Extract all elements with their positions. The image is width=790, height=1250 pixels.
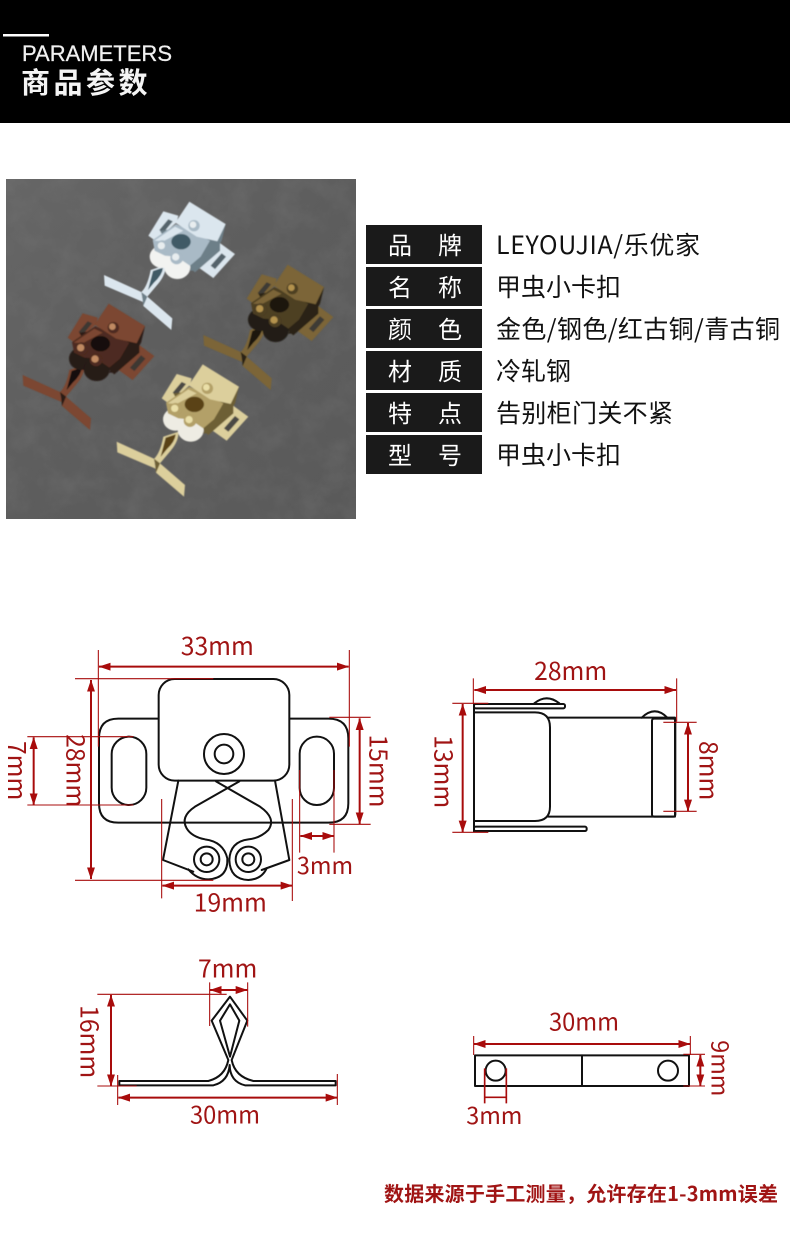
row: brand: 牌 (438, 226, 462, 261)
row: brand: LEYOUJIA/乐优家 (496, 226, 700, 262)
row: brand (366, 225, 700, 264)
row: feature: 点 (438, 394, 462, 429)
row: feature: 告别柜门关不紧 (496, 394, 673, 430)
dimension: 3mm hole: 3mm (466, 1097, 522, 1131)
dimension: 28mm height: 28mm (59, 734, 95, 807)
product photo: four cabinet latches on concrete (6, 179, 356, 519)
dimension: 28mm height (59, 679, 213, 880)
dimension: 7mm slot (0, 737, 133, 805)
dimension: 7mm tip: 7mm (198, 949, 257, 985)
parameter table (366, 225, 780, 474)
antique bronze latch (203, 265, 333, 390)
row: feature (366, 393, 673, 432)
row: material: 冷轧钢 (496, 352, 571, 388)
dimension: 3mm slot width (297, 770, 353, 881)
header band (0, 0, 790, 123)
dimension: 33mm width: 33mm (181, 627, 254, 663)
dimension: 30mm length: 30mm (190, 1097, 260, 1131)
side outline (474, 698, 675, 832)
row: model (366, 435, 621, 474)
row: brand: 品 (388, 226, 412, 261)
gold latch (117, 364, 248, 497)
row: model: 甲虫小卡扣 (496, 436, 621, 472)
dimension: 28mm length (473, 652, 677, 722)
dimension: 30mm length: 30mm (549, 1004, 619, 1038)
dimension: 7mm slot: 7mm (0, 741, 36, 800)
red copper latch (23, 304, 154, 430)
silver latch (104, 202, 235, 330)
dimension: 13mm depth (427, 703, 488, 832)
dimension: 9mm width: 9mm (705, 1040, 739, 1096)
row: name: 甲虫小卡扣 (496, 268, 621, 304)
latch outline (99, 679, 348, 880)
row: name: 称 (438, 268, 462, 303)
dimension: 15mm plate (329, 717, 397, 824)
dimension: 19mm arms (162, 799, 292, 920)
dimension: 30mm length (474, 1004, 690, 1055)
row: material: 质 (438, 352, 462, 387)
dimension: 7mm tip (198, 949, 257, 1027)
dimension: 9mm width (683, 1040, 739, 1096)
dimension: 28mm length: 28mm (534, 652, 607, 688)
row: colour: 色 (438, 310, 462, 345)
diagram: latch side view (427, 652, 727, 832)
header accent line (3, 34, 49, 36)
dimension: 19mm arms: 19mm (194, 884, 267, 920)
footnote: measurement tolerance: 数据来源于手工测量，允许存在1-3mm误差 (384, 1178, 778, 1207)
dimension: 30mm length (118, 1074, 337, 1131)
row: name (366, 267, 621, 306)
row: material: 材 (388, 352, 412, 387)
dimension: 3mm hole (466, 1068, 522, 1131)
dimension: 16mm height: 16mm (73, 1005, 109, 1078)
row: colour (366, 309, 780, 348)
dimension: 16mm height (73, 994, 227, 1086)
dimension: 13mm depth: 13mm (427, 735, 463, 808)
dimension: 8mm roller (663, 722, 727, 811)
diagram: strike plate flat view (466, 1004, 739, 1131)
diagram: latch front view (0, 627, 397, 920)
row: name: 名 (388, 268, 412, 303)
heading: 商品参数: 商品参数 (21, 67, 151, 100)
row: colour: 金色/钢色/红古铜/青古铜 (496, 310, 780, 346)
row: model: 号 (438, 436, 462, 471)
dimension: 15mm plate: 15mm (361, 734, 397, 808)
strike outline (119, 997, 336, 1085)
heading: PARAMETERS: PARAMETERS (22, 41, 172, 66)
dimension: 3mm slot width: 3mm (297, 847, 353, 881)
diagram: strike plate side view (73, 949, 337, 1131)
dimension: 8mm roller: 8mm (691, 741, 727, 800)
row: colour: 颜 (388, 310, 412, 345)
dimension: 33mm width (98, 627, 349, 747)
flat plate outline (475, 1055, 689, 1086)
row: material (366, 351, 571, 390)
row: model: 型 (388, 436, 412, 471)
row: feature: 特 (388, 394, 412, 429)
